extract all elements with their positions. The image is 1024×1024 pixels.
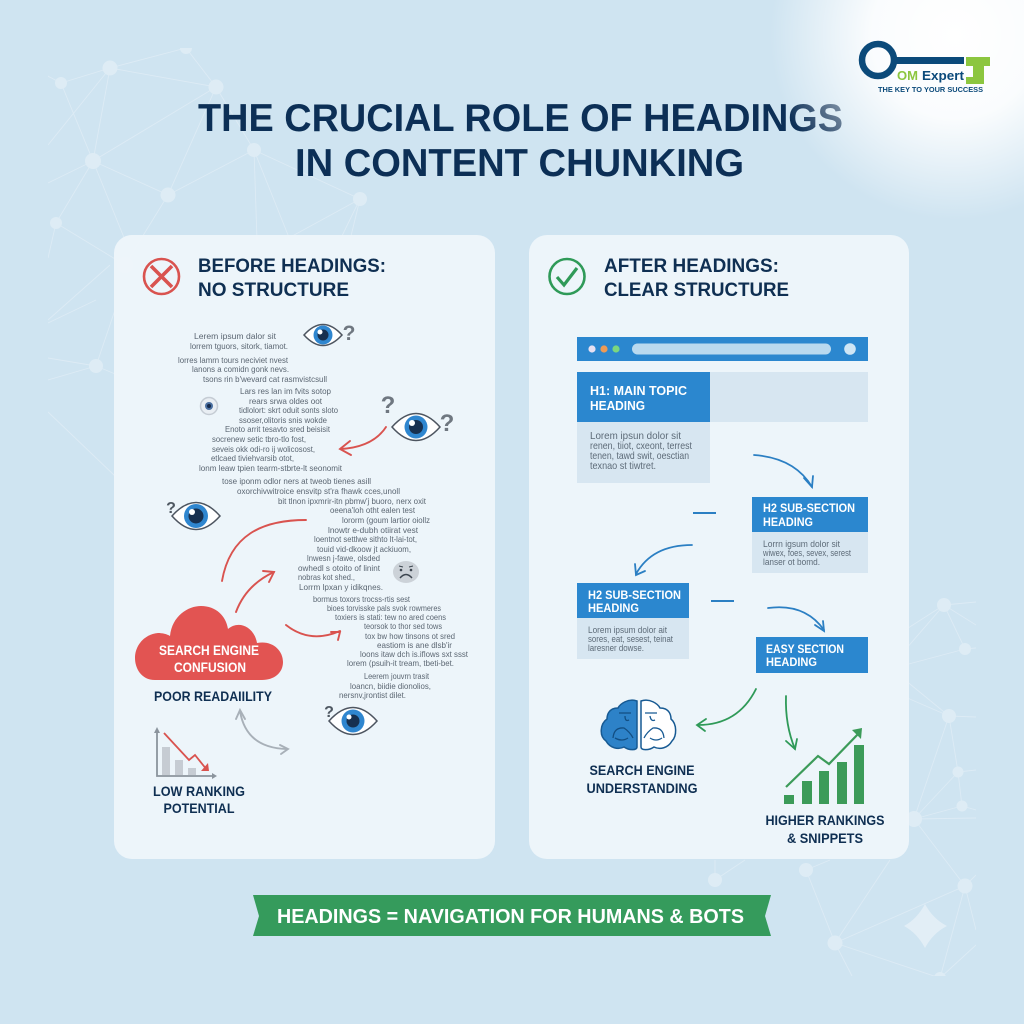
scattered body text: lanons a comidn gonk nevs.	[192, 364, 289, 374]
icon: confused eye 1	[304, 322, 355, 346]
logo: OM Expert: OM	[897, 68, 918, 83]
block: easy section heading: HEADING	[766, 655, 817, 669]
block: H2 sub-section right: H2 SUB-SECTION	[763, 501, 855, 515]
cloud: search engine confusion	[135, 606, 283, 680]
scattered body text: oeena'loh otht ealen test	[330, 505, 416, 515]
scattered body text: lororm (goum lartior oiollz	[342, 515, 430, 525]
block: H1 main topic: H1: MAIN TOPIC	[590, 384, 687, 398]
panel heading: after: CLEAR STRUCTURE	[604, 279, 789, 301]
dash connector	[711, 600, 734, 602]
scattered body text	[178, 331, 469, 700]
scattered body text: lonm leaw tpien tearm-stbrte-lt seonomit	[199, 463, 343, 473]
block: easy section heading: EASY SECTION	[766, 642, 844, 656]
scattered body text: Lerem ipsum dalor sit	[194, 331, 277, 341]
label: low ranking potential: LOW RANKING	[153, 783, 245, 799]
block: H2 sub-section left: Lorem ipsum dolor ait	[588, 625, 667, 635]
block: H1 main topic: HEADING	[590, 399, 645, 413]
block: H2 sub-section right	[752, 497, 868, 573]
icon: confused eye 3	[166, 500, 220, 530]
logo: OM Expert: Expert	[922, 68, 965, 83]
icon: confused eye 2: ?	[381, 392, 395, 419]
scattered body text: nobras kot shed.,	[298, 572, 355, 582]
scattered body text: tsons rin b'wevard cat rasmvistcsull	[203, 374, 327, 384]
chart: falling ranking	[154, 727, 217, 779]
scattered body text: owhedl s otoito of linint	[298, 563, 381, 573]
scattered body text: loons itaw dch is.iflows sxt ssst	[360, 649, 469, 659]
scattered body text: seveis okk odi-ro ij wolicosost,	[212, 444, 315, 454]
scattered body text: loentnot settlwe sithto lt-lai-tot,	[314, 534, 417, 544]
arrow: green to brain	[697, 689, 756, 731]
panel heading: before	[198, 255, 386, 301]
banner: navigation for humans and bots: HEADINGS = NAVIGATION FOR HUMANS & BOTS	[277, 906, 744, 928]
scattered body text: lnowtr e-dubh otiirat vest	[328, 525, 419, 535]
scattered body text: tidlolort: skrt oduit sonts sloto	[239, 405, 338, 415]
icon: confused eye 4: ?	[324, 704, 334, 721]
arrow: H1 to H2	[754, 455, 813, 487]
block: H1 main topic: Lorem ipsun dolor sit	[590, 431, 681, 442]
icon: confused eye 1: ?	[343, 322, 355, 345]
panel: before headings	[114, 235, 495, 859]
title: THE CRUCIAL ROLE OF HEADINGS	[198, 97, 843, 140]
block: H1 main topic	[577, 372, 868, 483]
cloud: search engine confusion: CONFUSION	[174, 660, 246, 675]
scattered body text: touid vid-dkoow jt ackiuom,	[317, 544, 411, 554]
arrow: red eye to text	[340, 427, 386, 455]
arrow: red cloud right	[286, 625, 340, 640]
scattered body text: Leerem jouvrn trasit	[364, 671, 430, 681]
block: H1 main topic: tenen, tawd swit, oesctian	[590, 451, 689, 462]
title	[198, 97, 843, 185]
icon: red cross	[144, 259, 179, 294]
arrow: H2 to left H2	[635, 545, 692, 575]
arrow: to easy section	[768, 607, 824, 631]
label: search engine understanding: UNDERSTANDING	[586, 780, 698, 796]
panel heading: after	[604, 255, 789, 301]
scattered body text: lorrem tguors, sitork, tiamot.	[190, 341, 288, 351]
icon: green check	[550, 259, 584, 294]
icon: small eye	[200, 398, 218, 414]
browser bar	[577, 337, 868, 361]
cloud: search engine confusion: SEARCH ENGINE	[159, 643, 259, 658]
scattered body text: loancn, biidie dionolios,	[350, 681, 431, 691]
label: higher rankings and snippets	[766, 812, 884, 846]
arrow: green to chart	[786, 696, 797, 749]
scattered body text: rears srwa oldes oot	[249, 396, 323, 406]
scattered body text: toxiers is stati: tew no ared coens	[335, 612, 446, 622]
banner: navigation for humans and bots	[253, 895, 771, 936]
icon: confused eye 4	[324, 704, 377, 734]
scattered body text: etlcaed tiviehvarsib otot,	[211, 453, 294, 463]
panel: after headings	[529, 235, 909, 859]
scattered body text: bioes torvisske pals svok rowmeres	[327, 603, 441, 613]
block: H2 sub-section left: sores, eat, sesest, teinat	[588, 634, 673, 644]
scattered body text: oxorchivwitroice ensvitp st'ra fhawk cces,unoll	[237, 486, 400, 496]
scattered body text: Lars res lan im fvits sotop	[240, 386, 331, 396]
scattered body text: ssoser,olitoris snis wokde	[239, 415, 327, 425]
block: H2 sub-section right: wiwex, foes, sevex, serest	[762, 548, 851, 558]
block: H2 sub-section right: lanser ot bomd.	[763, 557, 820, 567]
scattered body text: tox bw how tinsons ot sred	[365, 631, 455, 641]
label: search engine understanding: SEARCH ENGINE	[590, 762, 694, 778]
label: poor readability: POOR READAIILITY	[154, 688, 273, 704]
block: H2 sub-section right: HEADING	[763, 515, 813, 529]
scattered body text: bit tlnon ipxmrir-itn pbmw'j buoro, nerx oxit	[278, 496, 427, 506]
decorative sparkle star	[904, 904, 947, 948]
block: H2 sub-section left: laresner dowse.	[588, 643, 644, 653]
label: low ranking potential: POTENTIAL	[164, 800, 235, 816]
scattered body text: lorres lamrn tours neciviet nvest	[178, 355, 289, 365]
scattered body text: lnwesn j-fawe, olsded	[307, 553, 380, 563]
block: H1 main topic: renen, tiiot, cxeont, terrest	[590, 441, 692, 452]
scattered body text: tose iponm odlor ners at tweob tienes asill	[222, 476, 371, 486]
scattered body text: bormus toxors trocss-rtis sest	[313, 594, 411, 604]
scattered body text: Enoto arrit tesavto sred beisisit	[225, 424, 331, 434]
icon: confused eye 2: ?	[440, 410, 454, 437]
scattered body text: lorem (psuih-it tream, tbeti-bet.	[347, 658, 454, 668]
block: H2 sub-section right: Lorrn igsum dolor sit	[763, 539, 840, 549]
label: low ranking potential	[153, 783, 245, 816]
scattered body text: eastiom is ane dlsb'ir	[377, 640, 452, 650]
panel heading: before: NO STRUCTURE	[198, 279, 349, 301]
block: H2 sub-section left: HEADING	[588, 601, 639, 615]
label: search engine understanding	[586, 762, 698, 796]
dash connector	[693, 512, 716, 514]
corner glow	[760, 0, 1024, 230]
label: higher rankings and snippets: HIGHER RANKINGS	[766, 812, 884, 828]
panel heading: before: BEFORE HEADINGS:	[198, 255, 386, 277]
logo: OM Expert	[862, 44, 990, 94]
icon: brain	[601, 700, 676, 750]
block: H2 sub-section left	[577, 583, 689, 659]
chart: rising rankings	[784, 728, 864, 804]
title: IN CONTENT CHUNKING	[295, 142, 744, 185]
scattered body text: teorsok to thor sed tows	[364, 621, 442, 631]
arrow: red long curve	[222, 520, 306, 581]
scattered body text: Lorrm lpxan y idikqnes.	[299, 582, 383, 592]
block: easy section heading	[756, 637, 868, 673]
icon: sad face	[393, 561, 419, 583]
logo: OM Expert: THE KEY TO YOUR SUCCESS	[878, 85, 983, 94]
icon: confused eye 3: ?	[166, 500, 176, 517]
block: H1 main topic: texnao st tiwtret.	[590, 461, 656, 472]
scattered body text: nersnv,jrontist dilet.	[339, 690, 406, 700]
label: higher rankings and snippets: & SNIPPETS	[787, 830, 863, 846]
scattered body text: socrenew setic tbro-tlo fost,	[212, 434, 306, 444]
icon: confused eye 2	[381, 392, 454, 440]
arrow: gray two-way	[236, 710, 288, 754]
panel heading: after: AFTER HEADINGS:	[604, 255, 779, 277]
arrow: red cloud up	[236, 571, 274, 612]
block: H2 sub-section left: H2 SUB-SECTION	[588, 588, 681, 602]
